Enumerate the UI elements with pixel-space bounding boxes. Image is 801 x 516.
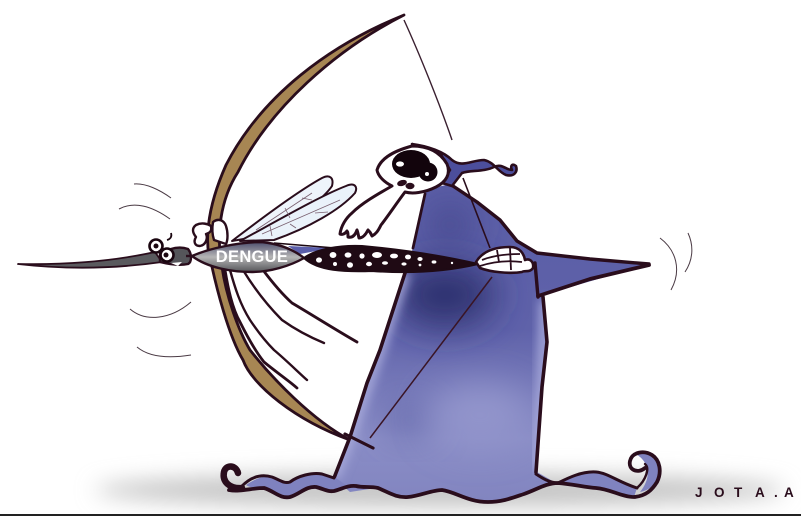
DENGUE label: DENGUE (216, 248, 288, 266)
nostrils (396, 179, 414, 189)
hood with tail (412, 144, 517, 186)
bowstring lower (370, 277, 492, 438)
bottom border line (0, 514, 801, 516)
skeletal hand gripping shaft (476, 247, 533, 273)
blue sliver behind abdomen (288, 246, 332, 254)
mosquito proboscis and head (18, 233, 191, 268)
motion lines right (660, 233, 692, 290)
bowstring upper (404, 20, 452, 140)
robe outline (334, 184, 649, 478)
eye sockets (392, 150, 438, 182)
mosquito legs (225, 270, 357, 388)
mosquito wings (232, 176, 356, 241)
bowstring over robe (463, 178, 490, 248)
signature: JOTA.A (695, 485, 794, 500)
eyes (150, 233, 174, 262)
mosquito thorax with label (186, 242, 304, 272)
robe hem waves with curls (224, 452, 660, 502)
bow (208, 15, 404, 440)
bow tip across robe (345, 434, 373, 448)
spotted abdomen (304, 246, 478, 272)
mosquito front feet on bow (193, 220, 228, 246)
motion lines left (119, 184, 191, 357)
robe (334, 184, 650, 502)
ground shadow (95, 473, 785, 507)
skull and reaching bone hand (340, 146, 448, 238)
